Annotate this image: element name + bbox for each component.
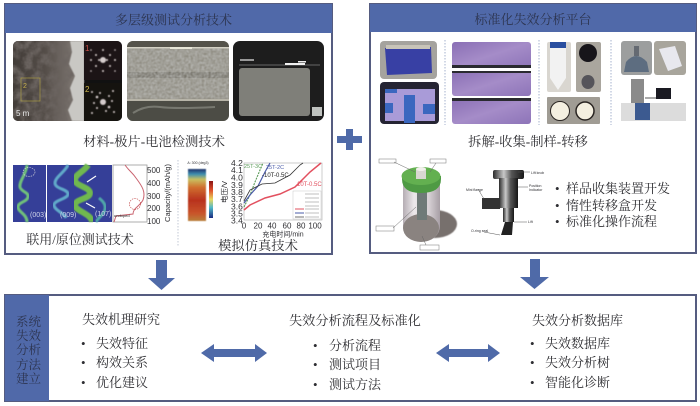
photos: sample tube, jar and discs <box>547 42 601 124</box>
sidebar: method title: 失效 <box>16 328 41 343</box>
heading: multilevel testing <box>5 4 332 33</box>
chart: in-situ testing heatmaps: 400 <box>147 179 161 188</box>
chart: in-situ testing heatmaps: Capacity/(mAh/g) <box>163 164 172 222</box>
chart: charging voltage curves: 80 <box>297 222 306 230</box>
list: platform development items: • <box>555 214 560 229</box>
chart: charging voltage curves: 3.7 <box>231 194 243 204</box>
diagram: transfer valve: Lift knob <box>531 171 544 175</box>
chart: charging voltage curves: 40 <box>268 222 277 230</box>
chart: charging voltage curves: 4.0 <box>231 172 243 182</box>
caption: combined in-situ testing: 联用/原位测试技术 <box>26 232 134 247</box>
diagram: transfer valve: Indicator <box>529 188 543 192</box>
column: failure analysis process and standardization: • <box>313 338 318 353</box>
column: failure mechanism research: 失效机理研究 <box>82 312 160 327</box>
chart: charging voltage curves: 25T-3C <box>244 164 262 170</box>
column: failure analysis database: • <box>530 375 535 390</box>
photo: battery CT scan <box>233 41 324 121</box>
icon: plus sign <box>337 129 362 150</box>
chart: in-situ testing heatmaps <box>13 164 172 226</box>
list: platform development items: 惰性转移盒开发 <box>566 198 657 213</box>
diagram: transfer valve: Lift <box>528 220 533 224</box>
list: platform development items: 样品收集装置开发 <box>566 181 670 196</box>
column: failure analysis database: 失效数据库 <box>545 336 610 351</box>
caption: simulation technology: 模拟仿真技术 <box>218 237 298 253</box>
chart: in-situ testing heatmaps: (107) <box>95 211 111 218</box>
column: failure analysis process and standardization: 测试方法 <box>329 377 382 392</box>
photo: TEM image with diffraction patterns: 1 <box>85 44 90 53</box>
column: failure analysis database: • <box>530 355 535 370</box>
chart: in-situ testing heatmaps: 100 <box>147 217 161 226</box>
chart: charging voltage curves: 25T-2C <box>266 165 284 171</box>
list: platform development items: • <box>555 198 560 213</box>
column: failure mechanism research: 优化建议 <box>96 375 148 390</box>
sidebar: method title: 方法 <box>16 357 41 372</box>
chart: charging voltage curves: 电压/V <box>219 181 229 203</box>
chart: simulation heatmap <box>187 161 213 221</box>
chart: in-situ testing heatmaps: undoped <box>114 213 130 218</box>
column: failure analysis database: 智能化诊断 <box>545 375 610 390</box>
chart: in-situ testing heatmaps: 200 <box>147 204 161 213</box>
arrow: right panel down <box>520 259 549 289</box>
chart: charging voltage curves <box>219 158 322 238</box>
heading: standardized platform <box>370 4 696 32</box>
column: failure analysis process and standardization: • <box>313 357 318 372</box>
chart: charging voltage curves: 4.2 <box>231 158 243 168</box>
chart: in-situ testing heatmaps: 500 <box>147 166 161 175</box>
diagram: transfer valve: O-ring seal <box>471 229 488 233</box>
list: platform development items: 标准化操作流程 <box>566 214 657 229</box>
column: failure analysis process and standardization: 测试项目 <box>329 357 381 372</box>
chart: charging voltage curves: 10T-0.5C <box>297 182 322 188</box>
chart: charging voltage curves: 3.8 <box>231 187 243 197</box>
list: platform development items: • <box>555 181 560 196</box>
column: failure analysis process and standardization: 失效分析流程及标准化 <box>289 312 421 328</box>
chart: in-situ testing heatmaps: (009) <box>60 212 76 219</box>
diagram: transfer valve: Position <box>529 184 542 188</box>
sidebar: method title: 分析 <box>16 342 41 357</box>
chart: charging voltage curves: 0 <box>242 222 247 230</box>
column: failure mechanism research: 失效特征 <box>96 336 148 351</box>
column: failure analysis process and standardization: • <box>313 377 318 392</box>
column: failure mechanism research: • <box>81 355 86 370</box>
heading: multilevel testing: 多层级测试分析技术 <box>115 12 232 28</box>
caption: material electrode cell testing: 材料-极片-电池检测技术 <box>83 133 225 149</box>
diagram: transfer valve: Mini flange <box>466 188 483 192</box>
chart: charging voltage curves: 充电时间/min <box>262 230 304 238</box>
sidebar: method title <box>5 295 49 401</box>
chart: charging voltage curves: 100 <box>308 222 322 230</box>
column: failure analysis process and standardization: 分析流程 <box>329 338 381 353</box>
column: failure analysis process and standardization <box>289 312 421 392</box>
column: failure analysis database <box>530 313 623 390</box>
column: failure analysis database: • <box>530 336 535 351</box>
photos: electrode strips <box>452 42 531 124</box>
chart: charging voltage curves: 3.6 <box>231 202 243 212</box>
photo: electrode cross-section <box>127 41 229 121</box>
chart: charging voltage curves: -10T-0.5C <box>262 173 289 179</box>
arrow: left panel down <box>148 260 175 290</box>
sidebar: method title: 建立 <box>16 371 41 386</box>
panel: system failure analysis method <box>5 295 696 401</box>
chart: charging voltage curves: 3.5 <box>231 208 243 218</box>
arrow: double left <box>201 344 267 362</box>
list: platform development items <box>555 181 670 229</box>
photos: cell disassembly <box>380 41 439 124</box>
chart: charging voltage curves: 60 <box>283 222 292 230</box>
column: failure mechanism research: • <box>81 375 86 390</box>
photo: TEM image with diffraction patterns: 5 m <box>16 109 30 118</box>
chart: charging voltage curves: 20 <box>254 222 263 230</box>
chart: in-situ testing heatmaps: (003) <box>30 212 46 219</box>
photo: TEM image with diffraction patterns: 2 <box>85 85 90 94</box>
photos: coater and electron microscope <box>621 41 686 121</box>
column: failure mechanism research: 构效关系 <box>96 355 148 370</box>
chart: charging voltage curves: 3.4 <box>231 216 243 226</box>
chart: charging voltage curves: 3.9 <box>231 180 243 190</box>
column: failure mechanism research <box>81 312 160 390</box>
column: failure analysis database: 失效分析树 <box>545 355 610 370</box>
sidebar: method title: 系统 <box>16 314 41 329</box>
chart: simulation heatmap: A: 300 (deg3) <box>187 161 209 165</box>
column: failure analysis database: 失效分析数据库 <box>532 313 623 328</box>
arrow: double right <box>436 344 500 362</box>
caption: disassembly collection sample transfer: 拆解-收集-制样-转移 <box>468 133 588 149</box>
photo: TEM image with diffraction patterns <box>13 41 122 121</box>
column: failure mechanism research: • <box>81 336 86 351</box>
heading: standardized platform: 标准化失效分析平台 <box>474 12 592 27</box>
photo: TEM image with diffraction patterns: 2 <box>23 83 27 90</box>
panel: standardized failure analysis platform <box>370 4 696 253</box>
panel: multilevel testing and analysis technology <box>5 4 332 254</box>
diagram: sample collection device <box>376 159 457 250</box>
chart: charging voltage curves: 4.1 <box>231 165 243 175</box>
chart: in-situ testing heatmaps: 300 <box>147 192 161 201</box>
diagram: transfer valve <box>466 170 544 235</box>
